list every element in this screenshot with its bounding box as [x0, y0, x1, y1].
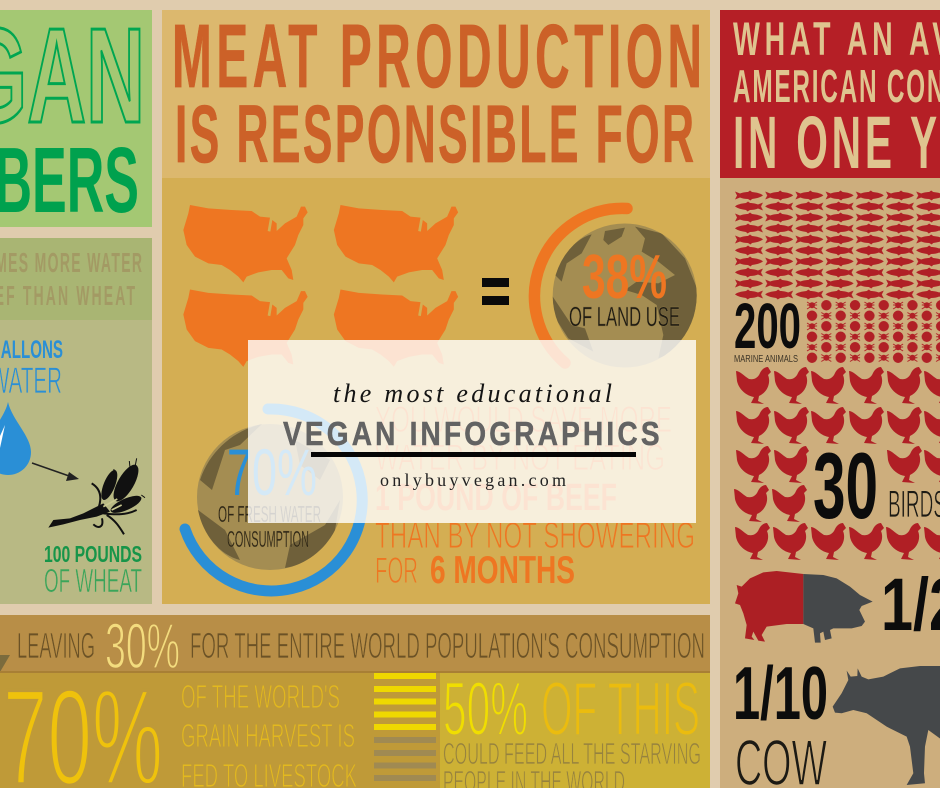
- icon: wheat: [48, 458, 145, 534]
- text: leaving: LEAVING: [17, 625, 95, 666]
- chart: 70 percent fresh water globe: CONSUMPTION: [227, 526, 309, 552]
- text: the most educational: the most educational: [333, 379, 612, 408]
- text block: save more water: YOU WOULD SAVE MORE: [375, 399, 672, 440]
- panel: animals consumed: [720, 178, 940, 788]
- icon: half pig: [735, 571, 873, 643]
- icon grid: chickens: [734, 367, 940, 560]
- chart: 70 percent fresh water globe: [185, 409, 362, 591]
- text block: save more water: 1 POUND OF BEEF: [375, 477, 617, 519]
- chart: 38 percent land use globe: [535, 208, 698, 368]
- text: could feed: COULD FEED ALL THE STARVING: [443, 736, 701, 771]
- text: 30%: 30%: [105, 610, 180, 682]
- icon grid: fish: [735, 190, 940, 300]
- text: 70%: 70%: [227, 435, 317, 509]
- text: of the world's: OF THE WORLD'S: [181, 678, 340, 715]
- icon: equals: [482, 278, 509, 305]
- text block: save more water: FOR: [375, 550, 418, 591]
- panel: leaving 30 percent banner: [0, 610, 710, 682]
- text: of land use: OF LAND USE: [569, 301, 680, 332]
- panel: average american header: [720, 10, 940, 184]
- heading line 1: MEAT PRODUCTION: [172, 7, 702, 107]
- text: of fresh water: OF FRESH WATER: [218, 501, 321, 527]
- text: 30: 30: [813, 433, 878, 538]
- arrow: water to wheat: [32, 463, 79, 481]
- icon: cow: [833, 666, 940, 785]
- icon: water drop: [0, 402, 31, 475]
- text: 1/10: 1/10: [733, 651, 828, 735]
- panel: feed the starving: [440, 667, 710, 788]
- text: 100 pounds: 100 POUNDS: [44, 541, 142, 567]
- text block: save more water: 6 MONTHS: [430, 549, 575, 592]
- text: vegan infographics: VEGAN INFOGRAPHICS: [283, 416, 660, 453]
- chart: striped bars: [374, 673, 436, 781]
- text: grain harvest is: GRAIN HARVEST IS: [181, 717, 355, 754]
- panel: water for beef vs wheat: [0, 238, 152, 604]
- panel: meat production stats: [162, 178, 710, 604]
- heading line 2: IS RESPONSIBLE FOR: [175, 87, 694, 179]
- text: of this: OF THIS: [541, 667, 700, 752]
- icon: four US maps: [183, 205, 458, 367]
- panel: vegan numbers header: [0, 0, 152, 232]
- panel: grain harvest: [0, 661, 710, 788]
- rule: [311, 452, 636, 457]
- text: site url: onlybuyvegan.com: [380, 470, 566, 490]
- text: 38%: 38%: [582, 243, 667, 312]
- text block: save more water: WATER BY NOT EATING: [375, 437, 665, 478]
- text block: save more water: THAN BY NOT SHOWERING: [375, 515, 695, 556]
- text: 50%: 50%: [443, 667, 528, 752]
- text: of wheat: OF WHEAT: [44, 562, 142, 599]
- text: marine animals: MARINE ANIMALS: [734, 354, 798, 365]
- icon: dark pointer: [0, 655, 10, 672]
- text: 200: 200: [734, 290, 801, 362]
- overlay card: title: [248, 340, 696, 523]
- panel: meat production title: [162, 7, 710, 179]
- text block: save more water: [375, 399, 695, 592]
- icon grid: shellfish: [805, 300, 940, 363]
